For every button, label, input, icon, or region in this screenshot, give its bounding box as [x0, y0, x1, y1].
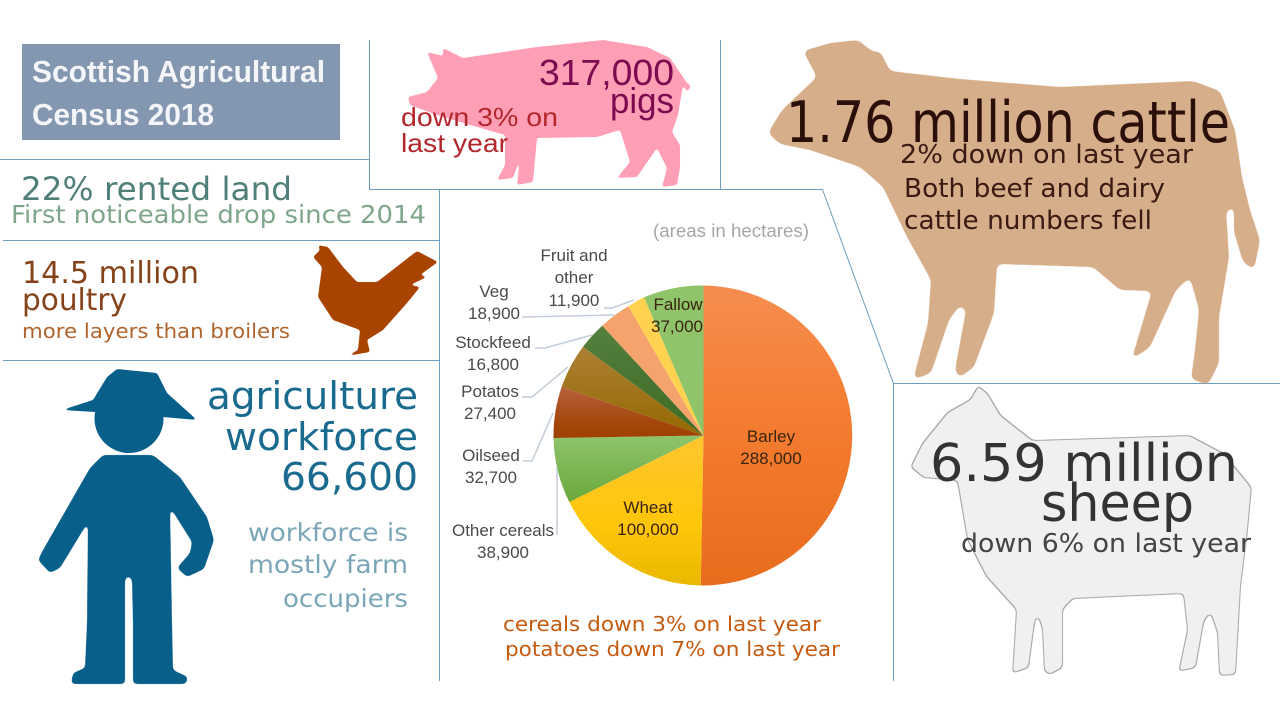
- pig label: pigs: [610, 80, 674, 121]
- workforce note line 3: occupiers: [283, 584, 408, 613]
- label: potatos: 27,400: [464, 404, 516, 423]
- label: other cereals: Other cereals: [452, 521, 554, 540]
- cattle change: 2% down on last year: [900, 140, 1193, 170]
- cereals note: cereals down 3% on last year: [503, 612, 822, 636]
- panel: workforce: [38, 369, 418, 684]
- label: stockfeed: Stockfeed: [455, 333, 531, 352]
- rented land heading: 22% rented land: [21, 170, 292, 208]
- pie chart: [553, 285, 852, 586]
- label: other cereals: 38,900: [477, 543, 529, 562]
- sheep change: down 6% on last year: [961, 529, 1251, 559]
- sheep label: sheep: [1041, 474, 1194, 534]
- label: oilseed: 32,700: [465, 468, 517, 487]
- label: barley: 288,000: [740, 449, 802, 468]
- icon: pig: [408, 40, 691, 187]
- units note: (areas in hectares): [653, 221, 809, 241]
- sheep count: 6.59 million: [930, 434, 1238, 494]
- cattle note line 2: cattle numbers fell: [904, 206, 1152, 236]
- label: fruit and other: other: [555, 268, 594, 287]
- panel: poultry: [22, 245, 438, 356]
- workforce note line 2: mostly farm: [248, 550, 408, 579]
- panel: land use pie chart: [452, 221, 852, 661]
- panel: rented land: [11, 170, 426, 229]
- icon: cow: [768, 40, 1260, 385]
- workforce note: workforce is: [248, 518, 408, 547]
- label: veg: 18,900: [468, 304, 520, 323]
- rented land note: First noticeable drop since 2014: [11, 200, 426, 229]
- leader lines: [522, 300, 634, 535]
- label: potatos: Potatos: [461, 382, 519, 401]
- pig change line 2: last year: [401, 128, 508, 158]
- pig change: down 3% on: [401, 102, 558, 132]
- poultry label: poultry: [22, 283, 127, 318]
- workforce number: 66,600: [281, 455, 418, 499]
- title: Scottish Agricultural: [32, 54, 325, 89]
- cattle note: Both beef and dairy: [904, 174, 1165, 204]
- label: wheat: Wheat: [623, 498, 673, 517]
- label: barley: Barley: [747, 427, 796, 446]
- label: fallow: Fallow: [653, 295, 703, 314]
- title: Census 2018: [32, 97, 214, 132]
- icon: sheep: [910, 385, 1252, 676]
- label: fruit and other: Fruit and: [540, 246, 608, 265]
- label: fallow: 37,000: [651, 317, 703, 336]
- icon: farmer: [38, 369, 214, 684]
- panel: pigs: [401, 40, 691, 187]
- workforce heading line 2: workforce: [225, 415, 418, 459]
- panel: cattle: [768, 40, 1260, 385]
- label: fruit and other: 11,900: [549, 291, 599, 310]
- label: wheat: 100,000: [617, 520, 679, 539]
- pig count: 317,000: [539, 52, 674, 93]
- potatoes note: potatoes down 7% on last year: [505, 637, 841, 661]
- label: veg: Veg: [479, 282, 509, 301]
- title: [22, 44, 340, 140]
- workforce heading: agriculture: [207, 374, 418, 418]
- panel: sheep: [910, 385, 1252, 676]
- label: stockfeed: 16,800: [467, 355, 519, 374]
- icon: hen: [313, 245, 438, 356]
- poultry count: 14.5 million: [22, 256, 199, 291]
- poultry note: more layers than broilers: [22, 319, 290, 343]
- label: oilseed: Oilseed: [462, 446, 520, 465]
